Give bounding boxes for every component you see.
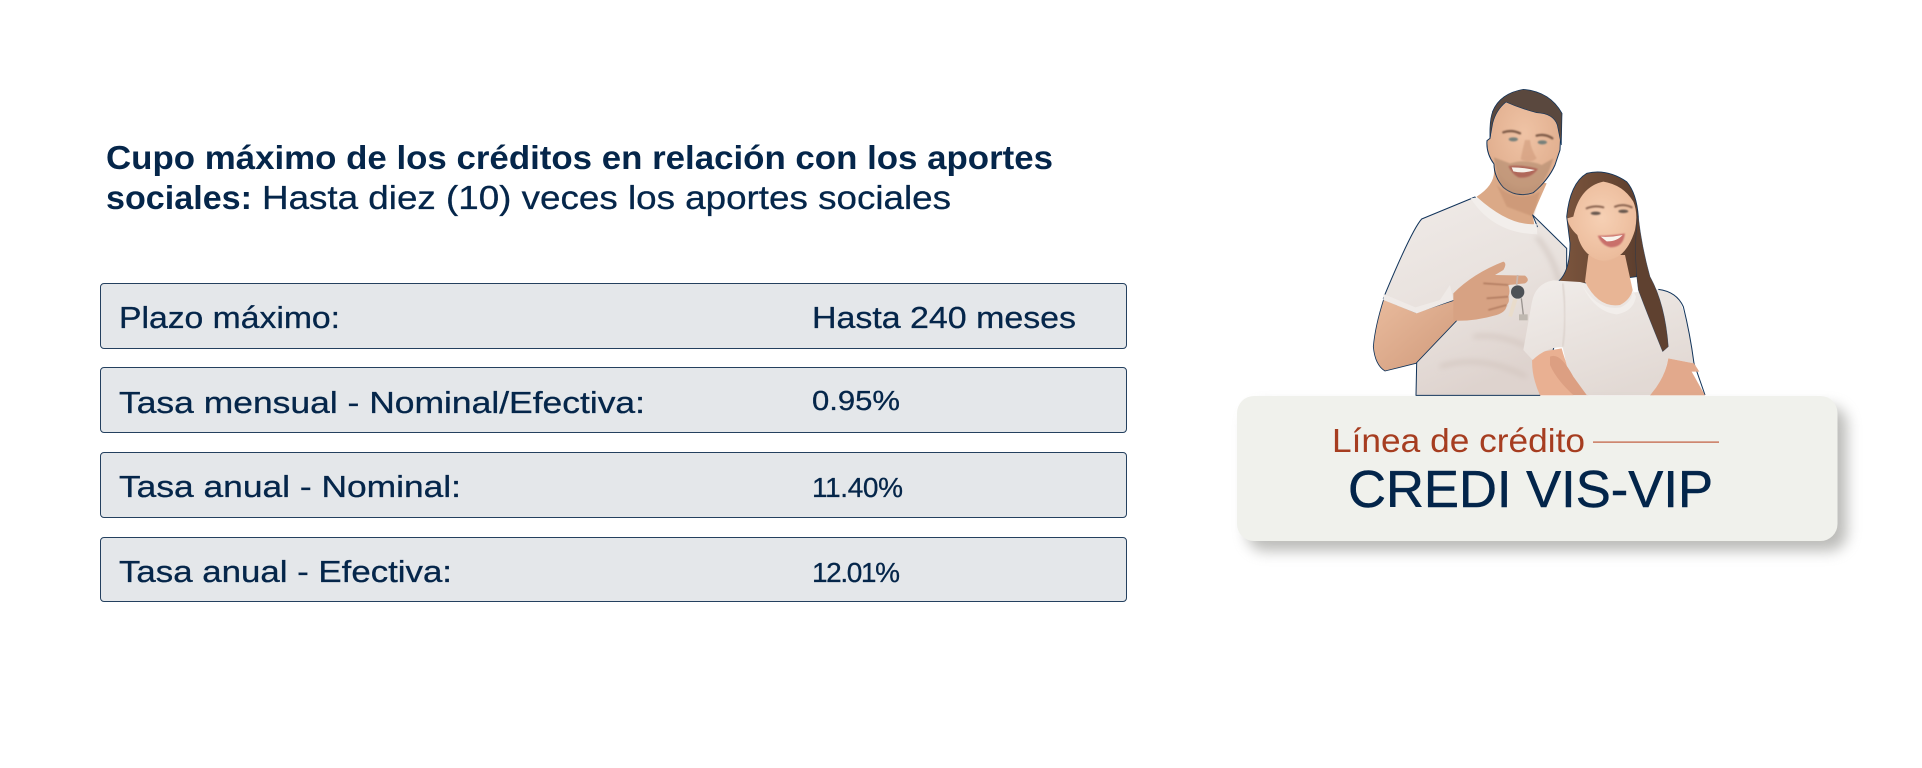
woman neck <box>1585 255 1633 305</box>
card subtitle: Línea de crédito <box>1332 422 1585 459</box>
row: tasa mensual: 0.95% <box>812 385 900 416</box>
row: tasa mensual <box>100 368 1126 432</box>
row: tasa anual nominal: Tasa anual - Nominal: <box>119 470 461 504</box>
woman collar <box>1581 282 1636 314</box>
man sleeve hem <box>1383 285 1453 313</box>
man hair <box>1490 89 1562 145</box>
keys <box>1508 275 1528 320</box>
woman <box>1523 172 1705 395</box>
subtitle rule <box>1593 442 1719 443</box>
row: tasa anual nominal <box>100 452 1126 518</box>
woman fingers <box>1550 356 1587 395</box>
illustration: couple with keys <box>1373 89 1705 395</box>
man neck <box>1477 170 1547 228</box>
card body <box>1237 396 1838 541</box>
card title: CREDI VIS-VIP <box>1348 461 1713 519</box>
man neck shadow <box>1497 185 1540 217</box>
man collar <box>1471 197 1537 234</box>
woman shirt outline right <box>1658 289 1705 395</box>
woman head <box>1567 182 1636 262</box>
man <box>1373 89 1567 395</box>
man face details <box>1503 131 1552 178</box>
woman sleeve seam <box>1563 283 1565 347</box>
woman right arm and hand <box>1650 358 1705 395</box>
man hand <box>1453 262 1528 321</box>
woman front hair <box>1636 217 1668 352</box>
heading: cupo máximo: Hasta diez (10) veces los aportes sociales <box>262 180 951 217</box>
heading: cupo máximo <box>106 140 1053 217</box>
card shadow <box>1247 406 1847 551</box>
heading: cupo máximo: sociales: <box>106 180 252 217</box>
woman left arm <box>1532 348 1588 395</box>
row: tasa anual efectiva <box>100 538 1126 602</box>
man arm <box>1373 299 1457 371</box>
man teeth <box>1512 167 1535 172</box>
row: tasa anual efectiva: 12.01% <box>812 557 900 588</box>
woman teeth <box>1601 235 1623 241</box>
woman back hair <box>1557 172 1638 283</box>
row: plazo máximo <box>100 284 1126 348</box>
woman shirt <box>1523 280 1694 395</box>
row: tasa anual efectiva: Tasa anual - Efectiva: <box>119 555 452 589</box>
man head <box>1487 90 1562 195</box>
woman face details <box>1587 205 1632 247</box>
card: línea de crédito <box>1237 396 1847 551</box>
man shirt folds <box>1440 237 1560 377</box>
man shirt <box>1383 197 1567 395</box>
man stubble <box>1494 157 1553 194</box>
row: tasa anual nominal: 11.40% <box>812 472 903 503</box>
row: plazo máximo: Hasta 240 meses <box>812 301 1076 335</box>
row: tasa mensual: Tasa mensual - Nominal/Efectiva: <box>119 386 645 420</box>
row: plazo máximo: Plazo máximo: <box>119 301 340 335</box>
heading: cupo máximo: Cupo máximo de los créditos en relación con los aportes <box>106 140 1053 177</box>
